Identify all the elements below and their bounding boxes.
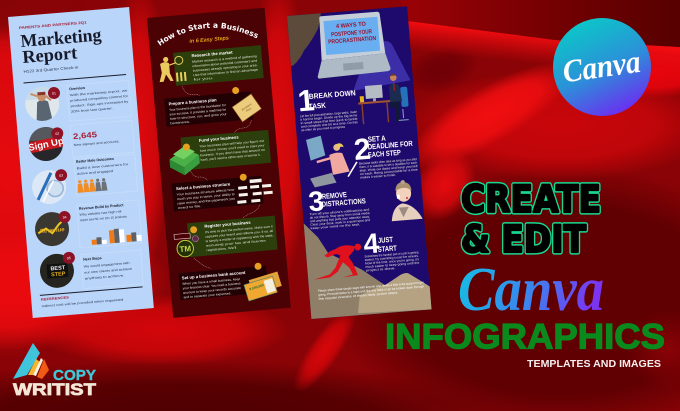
tip 2 xyxy=(306,128,419,188)
headline: create and edit: CREATE xyxy=(461,178,601,221)
icon: org chart xyxy=(236,178,273,204)
step 3 text xyxy=(199,132,266,162)
tip 2 body: makes it easier to finish. xyxy=(360,173,396,180)
photo: revenue graph: Revenue xyxy=(39,227,66,235)
step 2 text xyxy=(168,96,227,125)
connector xyxy=(190,169,207,182)
revenue text: Why website has high roll xyxy=(79,209,122,217)
photo: best step: BEST xyxy=(50,265,66,272)
tip 4 body: started. Try committing to just five minutes. xyxy=(365,254,419,262)
tip 2 heading: EACH STEP xyxy=(368,148,401,159)
numeral 2: 2 xyxy=(353,133,372,167)
step 1 text xyxy=(191,48,259,82)
step 6 text xyxy=(182,270,248,299)
row: outcomes xyxy=(30,154,138,205)
tip 1 body: and complete one bit at a time. Do this xyxy=(301,120,358,129)
next steps text: Next Steps xyxy=(83,256,102,262)
numeral 4: 4 xyxy=(362,227,381,260)
step 1 text: Research the market xyxy=(191,50,233,58)
step 2 text: Your business plan is the foundation for xyxy=(169,103,226,112)
closing text: the regular practice of these daily action steps. xyxy=(318,290,399,301)
revenue text: Revenue Build by Product xyxy=(79,203,124,211)
step 1 text: Use that information to find an advantage xyxy=(193,68,258,77)
overview text: produced compelling content for xyxy=(70,94,128,103)
laptop title xyxy=(327,21,376,46)
connector xyxy=(194,256,211,270)
panel: 4 ways to postpone procrastination xyxy=(287,6,431,319)
illustration: man at desk xyxy=(356,73,410,125)
step 6 text: When you have a small business, keep xyxy=(182,277,241,286)
step 4 xyxy=(171,171,275,224)
step 6 text: account to keep your records accurate xyxy=(183,286,241,295)
logo word writist: WRITIST xyxy=(13,380,97,399)
tip 1 body: in small steps that feel quick to tackle xyxy=(300,117,358,125)
outcomes text xyxy=(76,156,129,176)
step 6 text: Set up a business bank account xyxy=(182,270,246,280)
laptop with title xyxy=(313,11,391,79)
tip 1 heading: TASK xyxy=(308,101,327,111)
next steps text: our new clients and achieve xyxy=(84,267,133,275)
tip 1 body: Let the full procrastination, large tasks, make xyxy=(300,110,357,118)
icon: business plan book: Business xyxy=(241,102,253,112)
tip 3 body: Clear your desk, work in a quiet spot and xyxy=(310,218,371,227)
step 5 text: captures your brand and reflects you. If so, all xyxy=(205,229,274,239)
tip 3 xyxy=(307,177,423,230)
overview text: 20% from last quarter. xyxy=(71,106,113,114)
closing text xyxy=(318,280,425,301)
headline: create and edit: CREATE xyxy=(461,178,601,221)
references: REFERENCES xyxy=(41,295,70,302)
canva wordmark gradient: Canva xyxy=(458,256,604,324)
tip 3 body xyxy=(309,208,371,230)
next steps text: We would engagement with xyxy=(84,261,130,269)
row: revenue xyxy=(33,200,142,251)
step 5 text: It's time to pick the perfect name. Make sure it xyxy=(205,224,273,234)
tip 4 xyxy=(362,224,420,273)
references xyxy=(41,291,124,308)
headline: create and edit xyxy=(461,178,601,261)
connector xyxy=(242,205,261,218)
numeral 3: 3 xyxy=(307,185,325,217)
headline: create and edit: & EDIT xyxy=(461,218,587,261)
illustration: woman with tablet xyxy=(306,133,359,188)
step 2 text: business. xyxy=(170,120,191,125)
laptop title: POSTPONE YOUR xyxy=(331,29,373,39)
tip 3 body: keep your mind on the task. xyxy=(310,222,361,230)
illustration: woman face xyxy=(389,179,423,221)
laptop title: 4 WAYS TO xyxy=(336,22,367,30)
step 2 xyxy=(164,85,263,141)
row: overview xyxy=(24,80,132,125)
bar chart: revenue xyxy=(91,227,142,245)
panel: how to start a business xyxy=(147,8,291,318)
tip 4 body: Sometimes the hardest part of a job is getting xyxy=(364,250,419,259)
step 5 text: registration. We'll xyxy=(206,246,237,252)
logo mark xyxy=(13,343,49,379)
step 3 xyxy=(168,130,272,183)
outcomes text: active and engaged xyxy=(77,169,113,176)
headline: infographics: INFOGRAPHICS xyxy=(385,318,665,356)
tip 4 heading: JUST xyxy=(378,235,394,245)
report subtitle: H122 3rd Quarter Check-in xyxy=(23,65,79,74)
overview text: product. Sign-ups increased by xyxy=(70,99,129,108)
step 3 text: business. If you don't have that amount on xyxy=(200,148,265,157)
tip 4 body: much easier to keep going until the xyxy=(365,261,420,269)
step 4 text: need to file. xyxy=(178,204,202,210)
step 2 text: your success. It provides a roadmap for xyxy=(169,107,226,116)
canva badge xyxy=(553,18,651,116)
headline: create and edit: & EDIT xyxy=(461,218,587,261)
next steps text xyxy=(83,254,133,281)
tip 3 heading: REMOVE xyxy=(322,190,347,201)
outcomes text: Better Male Outcomes xyxy=(76,157,114,164)
tip 3 heading xyxy=(321,189,366,209)
number 5 badge xyxy=(190,226,197,234)
photo: best step xyxy=(39,253,75,289)
row: next steps xyxy=(39,246,143,292)
step 3 text: hand, you'll need to either raise or borrow it. xyxy=(200,153,261,162)
number 2 badge xyxy=(232,87,239,94)
step 4 text: Select a business structure xyxy=(176,181,231,191)
overview text xyxy=(69,82,130,114)
decorative blob top left xyxy=(287,13,325,66)
icon: trademark: TM xyxy=(179,244,192,254)
step 5 text: is simply a matter of registering with the state, xyxy=(206,233,274,243)
tip 4 heading: START xyxy=(377,243,397,254)
metric 2,645: 2,645 xyxy=(73,130,98,141)
tip 3 body: Turn off your phone's notifications and xyxy=(309,208,370,216)
step 6 text: and to separate your expenses. xyxy=(183,291,232,299)
icon: cheque card: $ 000,000 xyxy=(249,283,265,291)
number 4 badge xyxy=(239,173,247,181)
logo: copywritist xyxy=(13,343,97,399)
report title: Marketing xyxy=(20,24,102,51)
logo word copy: COPY xyxy=(53,367,96,384)
icon: money stack xyxy=(168,145,201,177)
badge 01: 01 xyxy=(52,91,56,96)
icon: business plan book: Plan xyxy=(245,106,252,113)
metric caption: New signups and accounts. xyxy=(74,139,120,147)
tip 4 body: project is done. xyxy=(366,266,396,273)
connector xyxy=(232,120,252,135)
tip 4 body: Most of the time, once you're going, it's xyxy=(365,257,420,266)
row: signups xyxy=(25,120,135,163)
tip 3 body: and anything that pulls your attention away. xyxy=(310,214,370,223)
revenue text: report saw $1 net 10x 15 products xyxy=(80,214,127,222)
closing text: going. Procrastination is a habit and like any habit it can be broken down through xyxy=(318,284,424,297)
panel: marketing report xyxy=(8,7,154,318)
tip 1 body xyxy=(300,110,359,132)
panel eyebrow: PARENTS AND PARTNERS 2Q1 xyxy=(19,21,87,30)
photo: best step: STEP xyxy=(51,271,66,278)
icon: worker with magnifier xyxy=(157,55,187,83)
tip 2 body xyxy=(359,157,418,180)
purple backdrop xyxy=(349,39,411,91)
step 5 xyxy=(173,216,279,271)
references: Indirect cost will be provided when requested xyxy=(41,297,124,308)
step 1 xyxy=(157,45,265,99)
step 4 text: Your business structure affects how xyxy=(176,187,235,197)
subtitle: in 6 Easy Steps xyxy=(189,35,229,45)
tip 1 heading: BREAK DOWN xyxy=(308,88,356,101)
step 6 text: your finances clear. You need a business xyxy=(183,281,241,290)
illustration: red hiker xyxy=(312,243,363,280)
step 1 text: businesses already operating in your area. xyxy=(193,63,258,73)
badge 03: 03 xyxy=(59,174,63,178)
subheading: TEMPLATES AND IMAGES xyxy=(527,358,661,370)
tip 1 xyxy=(296,73,410,132)
pictogram: people xyxy=(77,178,108,193)
tip 1 body: as often as you need to progress xyxy=(301,125,346,132)
step 4 text: raise money, and the paperwork you xyxy=(177,196,236,206)
step 6 xyxy=(178,261,284,307)
tip 2 heading xyxy=(366,131,414,159)
tip 4 heading xyxy=(377,235,397,254)
number 3 badge xyxy=(183,143,190,151)
step 3 text: how much money you'll need to start your xyxy=(200,143,265,153)
revenue text xyxy=(79,203,127,222)
step 4 text: much you pay in taxes, your ability to xyxy=(177,192,235,201)
step 1 text: information about potential customers and xyxy=(192,59,258,68)
tip 2 body: step. Write out dates and keep yourself xyxy=(359,164,418,173)
tip 2 body: Because tasks often take as long as you allot xyxy=(359,157,417,166)
tip 2 heading: SET A xyxy=(367,133,387,144)
report title xyxy=(20,24,103,67)
tip 2 body: them, it is valuable to set a deadline for each xyxy=(359,161,418,169)
tip 2 heading: DEADLINE FOR xyxy=(367,139,414,151)
tip 4 body xyxy=(364,250,420,273)
step 2 text: Prepare a business plan xyxy=(168,97,217,106)
report title: Report xyxy=(22,42,78,67)
step 1 text: Market research is a method of gathering xyxy=(192,54,257,64)
connector xyxy=(182,85,200,97)
laptop title: PROCRASTINATION xyxy=(328,36,376,46)
step 2 text: how to structure, run, and grow your xyxy=(170,112,227,121)
tip 3 heading: DISTRACTIONS xyxy=(321,196,366,209)
step 5 text: Register your business xyxy=(204,220,251,229)
tip 1 body: it hard to begin. Divide up the big items xyxy=(300,113,358,122)
overview text: Overview xyxy=(69,86,85,91)
step 4 text xyxy=(176,181,237,210)
canva wordmark white: Canva xyxy=(560,43,643,89)
badge 05: 05 xyxy=(67,256,71,260)
number 6 badge xyxy=(254,262,262,270)
tip 3 body: do not disturb. Stay away from social media xyxy=(310,211,370,220)
tip 2 body: on track. Being accountable for a time xyxy=(360,167,418,176)
next steps text: anything to achieve. xyxy=(85,273,125,281)
title: How to Start a Business xyxy=(157,22,258,46)
tip 1 heading xyxy=(308,88,357,111)
photo: traveller xyxy=(25,87,60,121)
badge 02: 02 xyxy=(55,132,59,136)
step 3 text: Your business plan will help you figure out xyxy=(199,139,264,148)
badge 04: 04 xyxy=(63,215,67,220)
photo: magnifier xyxy=(31,169,67,205)
outcomes text: Build a new customers for xyxy=(76,162,129,170)
ground shapes xyxy=(304,214,431,319)
step 5 text: securing your tax and license xyxy=(206,238,266,248)
closing text: Please share these simple ways with anyone who needs a little extra support to get xyxy=(318,280,424,293)
photo: sign up: Sign Up xyxy=(27,136,65,154)
step 3 text: Fund your business xyxy=(199,134,239,143)
numeral 1: 1 xyxy=(297,84,316,118)
overview text: With the marketing report, we xyxy=(69,88,128,97)
step 1 text: for you. xyxy=(193,76,214,82)
step 5 text xyxy=(204,218,275,252)
icon: business plan book xyxy=(232,94,261,122)
